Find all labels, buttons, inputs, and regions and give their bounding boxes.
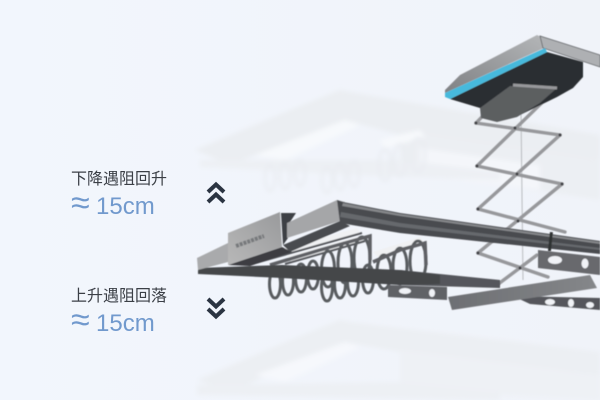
lift cable (521, 112, 523, 280)
main drying rack (197, 200, 600, 310)
hanger rods (250, 228, 424, 264)
value: lower: 15cm (96, 193, 155, 220)
ring carrier bar (270, 236, 370, 265)
right housing plate (287, 200, 345, 238)
value: lower: ≈ (71, 184, 90, 222)
cover shadow bar (228, 247, 292, 266)
top plate (445, 35, 544, 93)
label: rise then fall (71, 287, 167, 339)
cover logo mark (236, 236, 264, 246)
folding arm (448, 275, 597, 310)
ghost rack: raised position (195, 90, 600, 200)
value: rise (71, 301, 155, 339)
lower right beam (513, 296, 600, 310)
blue light strip (445, 48, 547, 99)
ring row: rear (322, 241, 426, 301)
ghost rack: lowered position (197, 320, 600, 400)
scissor joints (474, 122, 564, 270)
underside housing (450, 52, 583, 115)
lower left bracket (388, 285, 447, 300)
icon: down chevrons (208, 299, 224, 316)
heading: lower: 下降遇阻回升 (71, 170, 167, 188)
housing shadow (283, 221, 350, 252)
left extension plate (197, 243, 228, 270)
right arm (540, 36, 600, 67)
label: lower then rise (71, 170, 167, 222)
scissor arms (476, 85, 565, 285)
motor cover (480, 86, 557, 122)
pipe collar (548, 232, 553, 251)
value: lower (71, 184, 155, 222)
value: rise: 15cm (96, 310, 155, 337)
upper right bracket (538, 250, 600, 275)
value: rise: ≈ (71, 301, 90, 339)
ceiling unit (445, 35, 600, 122)
icon: up chevrons (208, 184, 224, 202)
gap in housing (281, 213, 296, 245)
hanging rings (270, 236, 426, 301)
lower cross bar (198, 265, 440, 285)
main pipe (337, 200, 600, 254)
rear frame beams (400, 270, 500, 288)
scissor lift and ceiling unit (445, 35, 600, 285)
mounting bar (513, 85, 557, 88)
ring row: front (270, 237, 370, 298)
sliding cover (228, 212, 296, 265)
heading: rise: 上升遇阻回落 (71, 287, 167, 305)
